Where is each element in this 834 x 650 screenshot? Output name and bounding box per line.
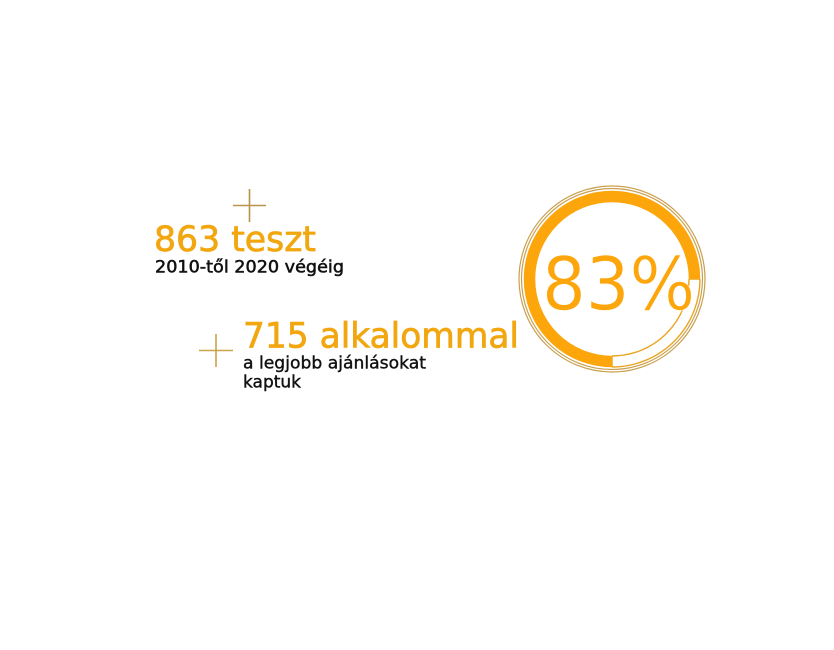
heading: 715 alkalommal: 715 alkalommal bbox=[243, 316, 519, 356]
text: date range: 2010-től 2020 végéig bbox=[155, 258, 344, 278]
remaining quadrant outline bbox=[612, 279, 700, 367]
text: best recommendations: kaptuk bbox=[243, 372, 301, 392]
outer thin ring bbox=[519, 186, 705, 372]
heading: 863 teszt: 863 teszt bbox=[154, 220, 316, 260]
text: best recommendations bbox=[243, 354, 426, 392]
thick progress arc bbox=[529, 196, 694, 362]
icon: plus sign bottom bbox=[199, 334, 233, 367]
text: best recommendations: a legjobb ajánlásokat bbox=[243, 354, 426, 374]
inner thin ring bbox=[522, 188, 702, 370]
icon: plus sign top bbox=[233, 189, 266, 222]
value: 83%: 83% bbox=[542, 242, 695, 328]
chart: 83% donut gauge bbox=[519, 186, 705, 372]
